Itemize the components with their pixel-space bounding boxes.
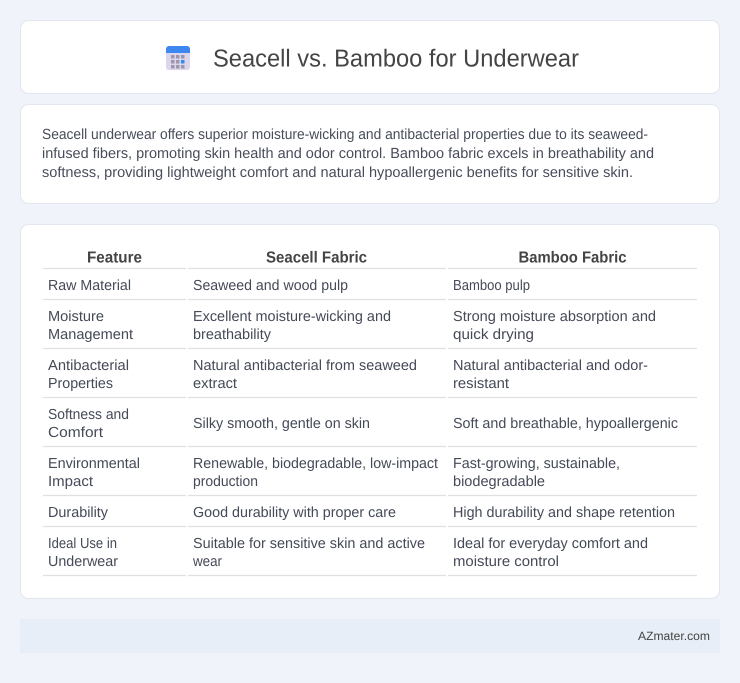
- row: softness and comfort: Silky smooth, gentle on skin: [193, 416, 370, 432]
- panel: title card: [20, 20, 720, 94]
- row: environmental impact: Renewable, biodegradable, low-impact: [193, 456, 438, 472]
- row: durability: [48, 505, 675, 521]
- title: Seacell vs. Bamboo for Underwear: [213, 46, 579, 73]
- row: antibacterial properties: Properties: [48, 376, 113, 392]
- row: softness and comfort: Softness and: [48, 407, 129, 423]
- row: moisture management: Strong moisture absorption and: [453, 309, 656, 325]
- row: raw material: Bamboo pulp: [453, 278, 530, 294]
- row: moisture management: Excellent moisture-wicking and: [193, 309, 391, 325]
- table header: Seacell Fabric: [266, 250, 367, 266]
- row: raw material: Seaweed and wood pulp: [193, 278, 348, 294]
- row: ideal use in underwear: wear: [192, 554, 222, 570]
- row: raw material: Raw Material: [48, 278, 131, 294]
- summary text: softness, providing lightweight comfort and natural hypoallergenic benefits for sensitive skin.: [42, 165, 633, 181]
- summary text: infused fibers, promoting skin health and odor control. Bamboo fabric excels in breathability and: [42, 146, 654, 162]
- table rules: [43, 268, 697, 576]
- row: ideal use in underwear: [48, 536, 648, 570]
- row: antibacterial properties: Natural antibacterial from seaweed: [193, 358, 417, 374]
- row: moisture management: quick drying: [453, 327, 534, 343]
- row: moisture management: Management: [48, 327, 133, 343]
- row: antibacterial properties: [48, 358, 648, 392]
- row: environmental impact: Fast-growing, sustainable,: [453, 456, 620, 472]
- row: durability: Good durability with proper care: [193, 505, 396, 521]
- row: environmental impact: production: [193, 474, 258, 490]
- row: environmental impact: biodegradable: [453, 474, 545, 490]
- row: antibacterial properties: Antibacterial: [48, 358, 129, 374]
- row: ideal use in underwear: Suitable for sensitive skin and active: [193, 536, 425, 552]
- row: antibacterial properties: resistant: [453, 376, 509, 392]
- icon: calendar: [166, 46, 190, 70]
- row: antibacterial properties: extract: [193, 376, 237, 392]
- row: moisture management: [48, 309, 656, 343]
- row: moisture management: breathability: [193, 327, 272, 343]
- row: ideal use in underwear: Ideal for everyday comfort and: [453, 536, 648, 552]
- row: environmental impact: [48, 456, 620, 490]
- row: environmental impact: Environmental: [48, 456, 140, 472]
- table header: Feature: [87, 250, 142, 266]
- footer credit: AZmater.com: [638, 629, 710, 643]
- table header: [87, 250, 627, 266]
- footer: [20, 619, 720, 653]
- summary text: [42, 127, 654, 181]
- row: ideal use in underwear: Underwear: [48, 554, 118, 570]
- row: softness and comfort: Comfort: [48, 425, 103, 441]
- table header: Bamboo Fabric: [518, 250, 627, 266]
- row: moisture management: Moisture: [48, 309, 104, 325]
- row: ideal use in underwear: Ideal Use in: [48, 536, 117, 552]
- row: raw material: [48, 278, 530, 294]
- row: ideal use in underwear: moisture control: [453, 554, 559, 570]
- panel: summary: [20, 104, 720, 204]
- summary text: Seacell underwear offers superior moisture-wicking and antibacterial properties due to its seaweed-: [42, 127, 648, 143]
- row: softness and comfort: Soft and breathable, hypoallergenic: [453, 416, 678, 432]
- row: durability: High durability and shape retention: [453, 505, 675, 521]
- row: antibacterial properties: Natural antibacterial and odor-: [453, 358, 648, 374]
- row: environmental impact: Impact: [48, 474, 93, 490]
- row: durability: Durability: [48, 505, 109, 521]
- panel: comparison table: [20, 224, 720, 598]
- row: softness and comfort: [48, 407, 678, 441]
